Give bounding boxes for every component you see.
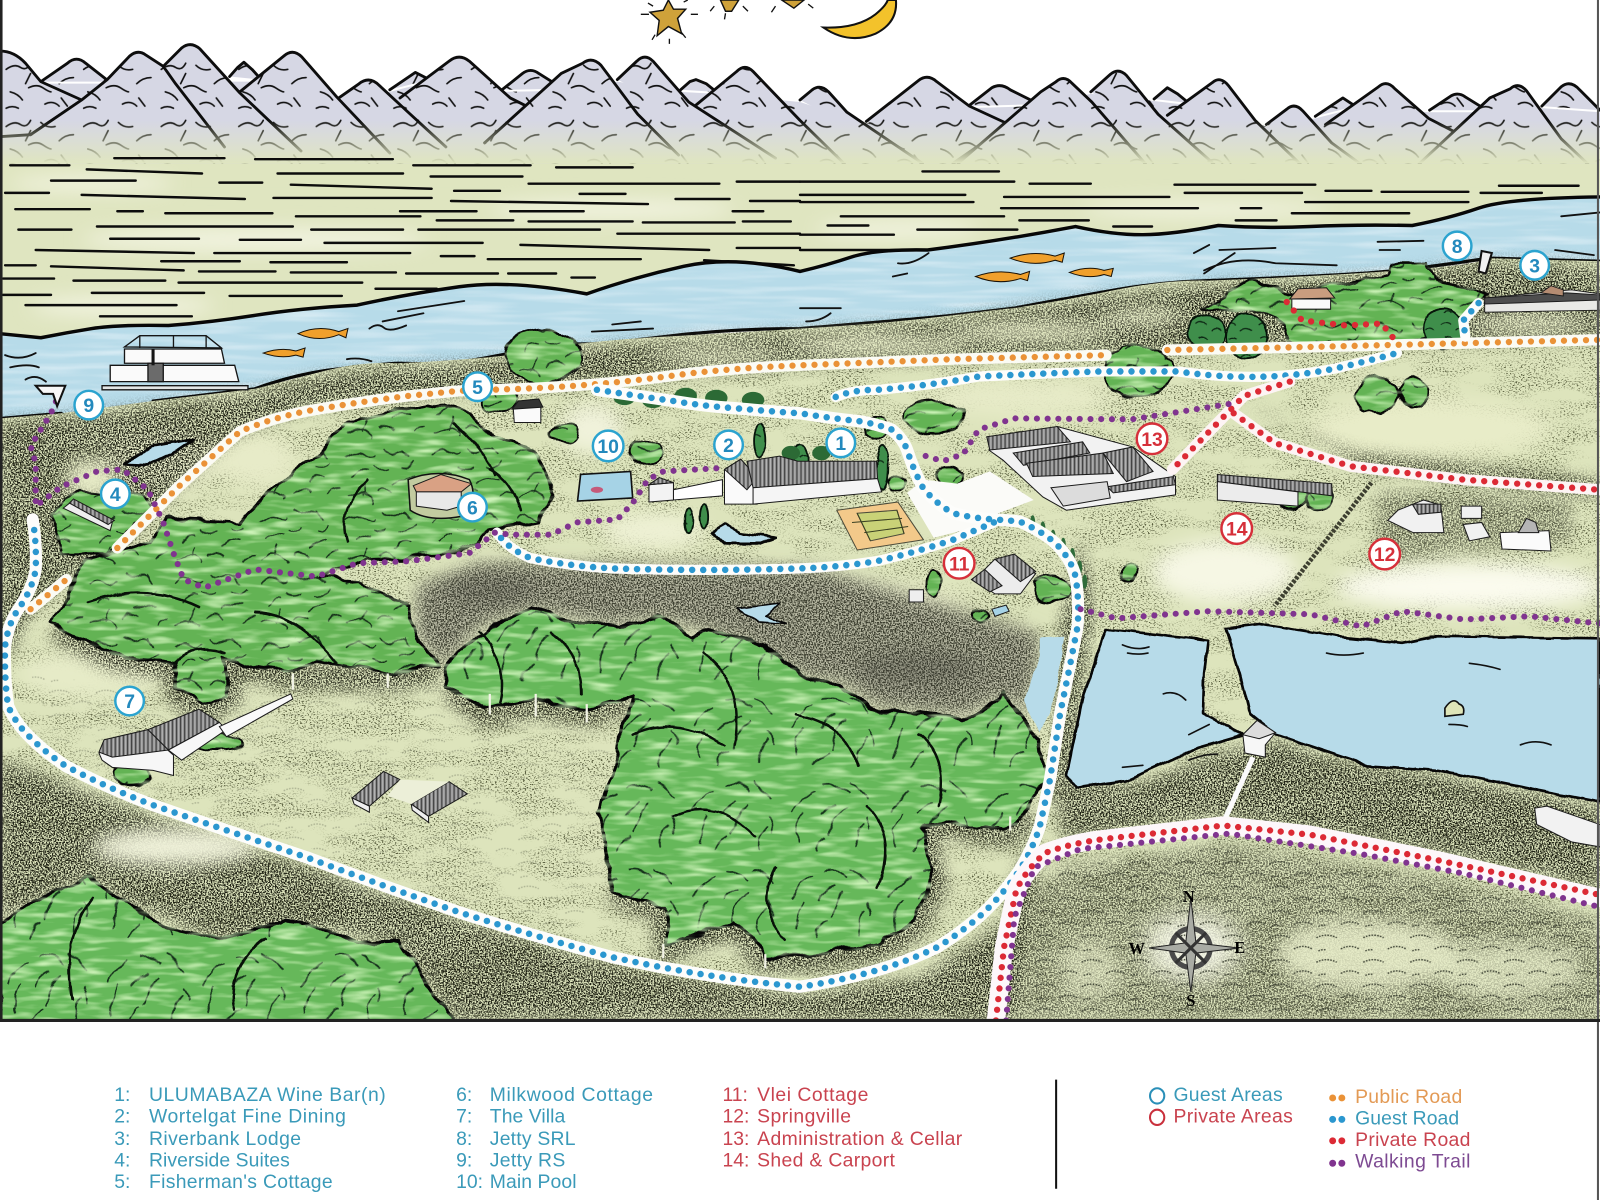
legend: guest locations column one xyxy=(114,1084,386,1193)
map marker 11 xyxy=(944,548,974,579)
building: pool house xyxy=(649,478,722,502)
building: house among trees xyxy=(1290,288,1335,309)
lake ripples and rock xyxy=(1122,645,1551,767)
legend: guest locations column two: Jetty RS xyxy=(490,1149,565,1171)
compass rose xyxy=(1129,887,1245,1010)
legend: private locations column: Springville xyxy=(757,1105,851,1127)
map marker 8: 8 xyxy=(1452,236,1463,258)
field contour hatching xyxy=(1031,847,1600,1020)
buildings: Vlei Cottage xyxy=(909,554,1036,616)
legend: guest locations column two: 9: xyxy=(456,1149,472,1171)
map marker 1: 1 xyxy=(835,433,846,455)
band of bank colour under mountains xyxy=(2,163,1600,180)
map marker 11: 11 xyxy=(949,553,970,575)
building: shed and carport xyxy=(1217,474,1333,506)
map marker 4: 4 xyxy=(110,484,121,506)
map marker 5: 5 xyxy=(472,377,483,399)
icon: stars and crescent moon xyxy=(641,0,896,44)
map marker 10 xyxy=(593,431,623,461)
forest: upper and lower woodland xyxy=(53,404,553,706)
map marker 5 xyxy=(463,372,492,401)
legend: guest locations column one: Fisherman's Cottage xyxy=(149,1171,333,1193)
legend: road keys: Private Road xyxy=(1355,1129,1470,1151)
light meadow patches xyxy=(20,380,1600,698)
pale field around compass xyxy=(92,829,1582,1000)
boat xyxy=(102,336,248,390)
map marker 4 xyxy=(101,480,130,508)
villa field hatching xyxy=(31,673,612,939)
legend: private locations column: 12: xyxy=(722,1105,749,1127)
mountain range xyxy=(2,43,1600,164)
legend: area keys xyxy=(1150,1084,1293,1127)
small ponds and lakes xyxy=(124,439,1600,802)
buildings: central sheds xyxy=(352,771,467,822)
legend: guest locations column two: Main Pool xyxy=(490,1171,577,1193)
dense stipple ground xyxy=(0,262,1600,1020)
legend: guest locations column one: Riverside Suites xyxy=(149,1149,290,1171)
legend: guest locations column two: 7: xyxy=(456,1105,472,1127)
legend: area keys: Private Areas xyxy=(1173,1105,1293,1127)
river banks outline xyxy=(0,197,1600,418)
legend: road keys: Guest Road xyxy=(1355,1107,1459,1129)
fish xyxy=(263,253,1113,357)
ground stipple sparse xyxy=(0,258,1600,1020)
map marker 9 xyxy=(74,391,103,419)
legend: guest locations column one: 3: xyxy=(114,1128,130,1150)
map marker 13: 13 xyxy=(1141,429,1163,451)
palm row xyxy=(613,388,831,460)
legend: guest locations column two xyxy=(456,1084,653,1193)
building: Fisherman's Cottage xyxy=(512,399,543,422)
building: lake jetty house xyxy=(1243,720,1276,757)
building: Riverside Suites xyxy=(63,499,114,531)
map marker 13 xyxy=(1137,423,1167,454)
map marker 7 xyxy=(115,687,144,715)
land base xyxy=(0,258,1600,1020)
main swimming pool xyxy=(578,471,633,501)
dark-foliage trees xyxy=(685,308,1463,533)
road: public road orange xyxy=(31,340,1600,609)
river ripples xyxy=(5,212,1600,382)
tree trunks under forests xyxy=(293,673,1010,968)
compass rose: W xyxy=(1129,939,1146,958)
building: administration and cellar xyxy=(987,427,1176,510)
track from lake house xyxy=(1222,757,1253,824)
forest: riverside grove xyxy=(1200,263,1487,343)
legend: private locations column: Vlei Cottage xyxy=(757,1084,868,1106)
legend: guest locations column two: 6: xyxy=(456,1084,472,1106)
map marker 14: 14 xyxy=(1226,519,1248,541)
building: main complex restaurant xyxy=(724,456,882,504)
shading under forest edges xyxy=(56,628,1031,961)
cypress row along guest road xyxy=(1030,515,1087,589)
legend: guest locations column two: The Villa xyxy=(490,1105,566,1127)
legend: road keys xyxy=(1329,1086,1470,1172)
shoreline strokes on far bank xyxy=(3,158,1579,316)
buildings: Springville xyxy=(1388,500,1551,551)
legend: guest locations column one: 2: xyxy=(114,1105,130,1127)
building: right shore house xyxy=(1535,806,1600,847)
mist at foot of mountains xyxy=(0,120,1600,163)
map marker 8 xyxy=(1443,232,1471,260)
building: Milkwood Cottage xyxy=(413,474,471,510)
mountain backdrop between peaks xyxy=(2,69,1600,164)
building: The Villa xyxy=(99,694,293,776)
legend: guest locations column two: Jetty SRL xyxy=(490,1128,576,1150)
map marker 9: 9 xyxy=(83,395,94,417)
map marker 6: 6 xyxy=(467,497,478,519)
map marker 10: 10 xyxy=(597,436,619,458)
road: private road red xyxy=(996,302,1600,1020)
legend: road keys: Public Road xyxy=(1355,1086,1462,1108)
legend: guest locations column one: ULUMABAZA Wine Bar(n) xyxy=(149,1084,386,1106)
clearing around Milkwood Cottage xyxy=(408,473,473,518)
map marker 7: 7 xyxy=(124,691,135,713)
map marker 1 xyxy=(827,429,855,457)
road: walking trail purple xyxy=(31,396,1600,1020)
forest: central woodland xyxy=(446,608,1045,957)
legend: area keys: Guest Areas xyxy=(1173,1084,1283,1106)
legend divider xyxy=(1055,1080,1057,1189)
legend: guest locations column two: 8: xyxy=(456,1128,472,1150)
legend: guest locations column two: 10: xyxy=(456,1171,483,1193)
map marker 3: 3 xyxy=(1529,255,1540,277)
map marker 12: 12 xyxy=(1374,544,1395,566)
legend: private locations column: 14: xyxy=(722,1149,749,1171)
forest: bottom left hill xyxy=(0,876,454,1024)
legend: private locations column: 13: xyxy=(722,1128,749,1150)
map marker 3 xyxy=(1520,251,1549,280)
map marker 6 xyxy=(458,493,487,521)
map marker 14 xyxy=(1221,513,1252,544)
legend: guest locations column one: 5: xyxy=(114,1171,130,1193)
map marker 12 xyxy=(1369,539,1400,569)
white farmyard xyxy=(907,471,1034,538)
river xyxy=(0,197,1600,418)
legend: private locations column: Shed & Carport xyxy=(757,1149,896,1171)
far river bank land xyxy=(2,188,1600,336)
forest canopy lobes xyxy=(69,423,941,1010)
legend: guest locations column two: Milkwood Cottage xyxy=(490,1084,653,1106)
pale patches on far bank xyxy=(10,176,1327,316)
legend: private locations column: Administration & Cellar xyxy=(757,1128,963,1150)
legend: guest locations column one: Wortelgat Fine Dining xyxy=(149,1105,346,1127)
forest: small wood by suites xyxy=(53,491,153,553)
jetties xyxy=(36,251,1492,406)
legend: private locations column xyxy=(722,1084,963,1171)
legend: guest locations column one: 1: xyxy=(114,1084,130,1106)
riverside trees and bush clusters xyxy=(114,329,1428,786)
compass rose: N xyxy=(1183,887,1195,906)
compass rose: E xyxy=(1234,938,1245,957)
tennis court xyxy=(837,502,923,550)
legend: guest locations column one: 4: xyxy=(114,1149,130,1171)
legend: guest locations column one: Riverbank Lodge xyxy=(149,1128,301,1150)
compass rose: S xyxy=(1186,991,1195,1010)
road: guest road blue xyxy=(5,303,1479,987)
pale gaps in riverside stipple xyxy=(65,310,1592,500)
dark smudged cliff band xyxy=(418,563,1039,714)
legend: road keys: Walking Trail xyxy=(1355,1150,1470,1172)
legend: private locations column: 11: xyxy=(722,1084,748,1106)
farm track fence line xyxy=(1274,483,1371,606)
map marker 2: 2 xyxy=(723,435,734,457)
building: riverbank lodge xyxy=(1485,286,1600,312)
map marker 2 xyxy=(714,431,743,459)
